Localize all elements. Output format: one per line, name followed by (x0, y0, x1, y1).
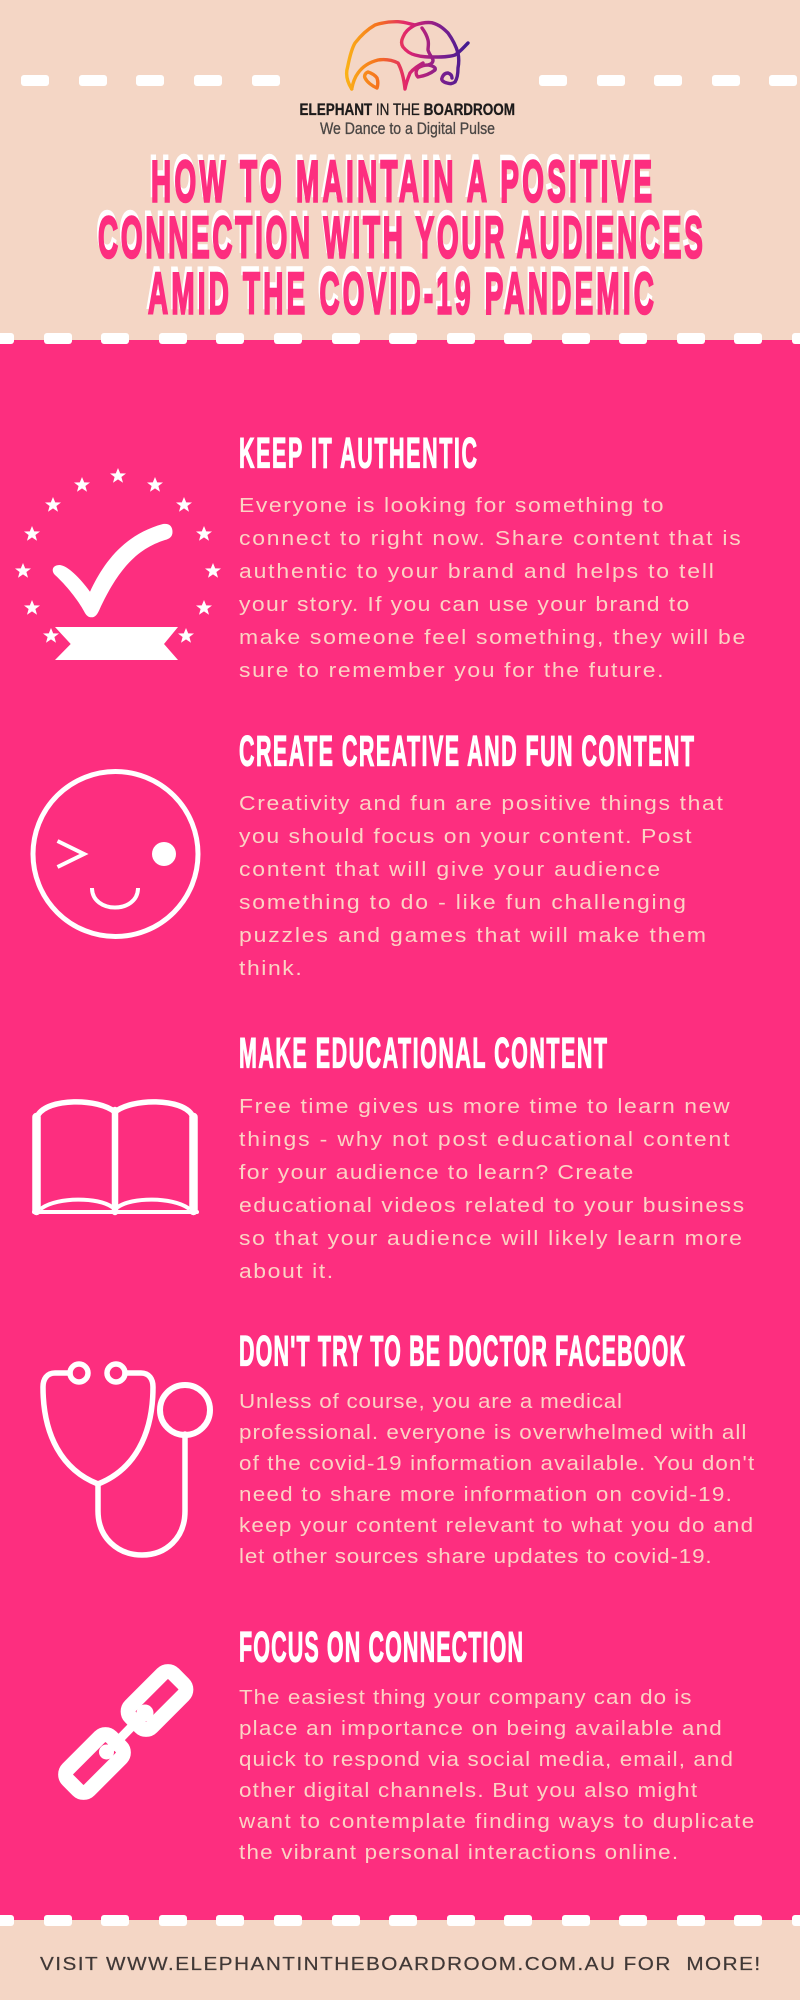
icon: check mark with stars and ribbon (15, 468, 221, 660)
section 3 body: so that your audience will likely learn more (239, 1226, 742, 1250)
background: footer band (0, 1920, 800, 2000)
title: CONNECTION WITH YOUR AUDIENCES (96, 200, 701, 265)
section 1 body: make someone feel something, they will be (239, 625, 745, 649)
section 2 heading: CREATE CREATIVE AND FUN CONTENT (239, 728, 694, 776)
section 4 body: need to share more information on covid-19. (239, 1484, 732, 1506)
section 5 heading: FOCUS ON CONNECTION (239, 1624, 523, 1672)
title: AMID THE COVID-19 PANDEMIC (146, 256, 652, 321)
title: CONNECTION WITH YOUR AUDIENCES (98, 205, 703, 270)
section 2 body: content that will give your audience (239, 857, 660, 881)
section 5 body: want to contemplate finding ways to duplicate (238, 1811, 754, 1833)
section 4 body: Unless of course, you are a medical (239, 1391, 622, 1413)
section 1 body (239, 493, 745, 682)
section 4 body: professional. everyone is overwhelmed with all (239, 1422, 746, 1444)
section 4 body (239, 1391, 754, 1568)
title: AMID THE COVID-19 PANDEMIC (148, 261, 654, 326)
section 2 body: Creativity and fun are positive things that (239, 791, 723, 815)
logo: tagline: We Dance to a Digital Pulse (320, 120, 495, 138)
section 1 body: connect to right now. Share content that is (239, 526, 741, 550)
section 3 body: things - why not post educational content (239, 1127, 730, 1151)
icon: open book (34, 1102, 197, 1212)
section 2 body (239, 791, 723, 980)
icon: winking smiley (33, 772, 198, 936)
section 1 body: authentic to your brand and helps to tell (239, 559, 714, 583)
section 3 body: Free time gives us more time to learn new (239, 1094, 730, 1118)
header dashes (21, 75, 797, 86)
section 2 body: think. (239, 956, 302, 980)
section 1 heading: KEEP IT AUTHENTIC (239, 430, 477, 478)
section 5 body: quick to respond via social media, email, and (239, 1749, 733, 1771)
section 2 body: something to do - like fun challenging (239, 890, 686, 914)
divider dashes bottom (0, 1915, 800, 1926)
section 3 body: educational videos related to your business (239, 1193, 744, 1217)
section 5 body: place an importance on being available and (239, 1718, 722, 1740)
section 3 heading: MAKE EDUCATIONAL CONTENT (239, 1030, 607, 1078)
section 5 body (238, 1687, 754, 1864)
section 3 body (239, 1094, 744, 1283)
title (96, 144, 703, 326)
title: HOW TO MAINTAIN A POSITIVE (151, 149, 652, 214)
section 5 body: other digital channels. But you also might (239, 1780, 697, 1802)
section 4 body: let other sources share updates to covid-19. (239, 1546, 712, 1568)
icon: chain links (62, 1668, 189, 1796)
section 2 body: you should focus on your content. Post (239, 824, 691, 848)
section 4 body: of the covid-19 information available. You don't (239, 1453, 754, 1475)
logo: company name: ELEPHANT IN THE BOARDROOM (300, 101, 515, 119)
section 1 body: sure to remember you for the future. (239, 658, 663, 682)
section 3 body: about it. (239, 1259, 333, 1283)
background: header (0, 0, 800, 340)
section 1 body: your story. If you can use your brand to (239, 592, 689, 616)
section 3 body: for your audience to learn? Create (239, 1160, 633, 1184)
section 5 body: The easiest thing your company can do is (239, 1687, 691, 1709)
title: HOW TO MAINTAIN A POSITIVE (150, 144, 651, 209)
section 2 body: puzzles and games that will make them (239, 923, 706, 947)
section 5 body: the vibrant personal interactions online. (239, 1842, 678, 1864)
section 4 heading: DON'T TRY TO BE DOCTOR FACEBOOK (239, 1328, 685, 1376)
divider dashes top (0, 333, 800, 344)
section 1 body: Everyone is looking for something to (239, 493, 663, 517)
background: pink main panel (0, 340, 800, 1920)
footer call to action: VISIT WWW.ELEPHANTINTHEBOARDROOM.COM.AU FOR MORE! (40, 1954, 760, 1975)
section 4 body: keep your content relevant to what you do and (239, 1515, 753, 1537)
logo: elephant line mark (347, 22, 468, 89)
icon: stethoscope (43, 1364, 210, 1555)
